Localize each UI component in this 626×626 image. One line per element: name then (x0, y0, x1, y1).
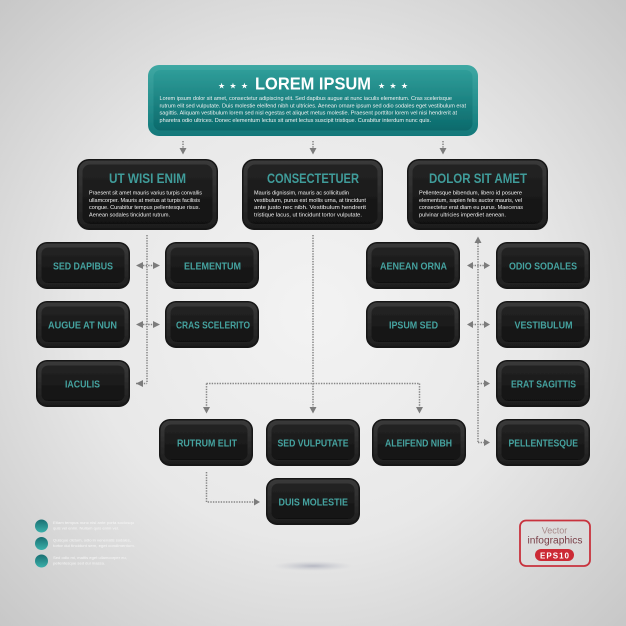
box: aleifend nibh: ALEIFEND NIBH (385, 437, 452, 449)
connector: right branch (467, 236, 490, 446)
diagram wrapper (35, 65, 590, 571)
header body text: sagittis. Aliquam vestibulum lorem sed nisl egestas et aliquet metus molestie. Praesent porttitor lorem vel nisi hendrerit at (160, 111, 457, 117)
card: consectetuer: CONSECTETUER (267, 170, 359, 186)
card: consectetuer: Mauris dignissim, mauris ac sollicitudin (254, 190, 349, 196)
card: dolor sit amet: consectetur erat diam eu purus. Maecenas (419, 205, 523, 211)
header body text: rutrum elit sed vulputate. Duis molestie eleifend nibh ut ultricies. Aenean ornare ipsum sed odio sodales eget vestibulum erat (160, 103, 466, 109)
badge: vector infographics eps10 (520, 520, 590, 566)
header body text (160, 96, 466, 124)
legend item 2: Quisque dictum, odio in venenatis sodales, (53, 538, 131, 542)
legend item 1 (35, 520, 134, 532)
legend item 3 (35, 554, 127, 568)
card: dolor sit amet: Pellentesque bibendum, libero id posuere (419, 190, 522, 196)
card: dolor sit amet (407, 159, 548, 230)
header title: LOREM IPSUM (255, 74, 371, 94)
box: pellentesque: PELLENTESQUE (508, 437, 578, 449)
connector: centre branch (203, 235, 423, 414)
legend item 3: pellentesque sed dui massa. (53, 560, 105, 566)
card: dolor sit amet: pulvinar ultricies imperdiet aenean. (419, 212, 506, 218)
box: iaculis: IACULIS (65, 378, 100, 390)
card: consectetuer: vestibulum, purus est mollis urna, at tincidunt (254, 198, 366, 204)
card: dolor sit amet: elementum, sapien felis auctor mauris, vel (419, 198, 522, 204)
legend (35, 520, 135, 568)
header body text: Lorem ipsum dolor sit amet, consectetur adipiscing elit. Sed dapibus augue at nunc iaculis elementum. Cras scelerisque (160, 96, 452, 102)
box: erat sagittis: ERAT SAGITTIS (511, 378, 576, 390)
box: aenean orna (366, 242, 460, 289)
connector: rutrum to duis (206, 472, 260, 506)
card: ut wisi enim: ullamcorper. Mauris at metus at turpis facilisis (89, 198, 200, 204)
box: sed dapibus: SED DAPIBUS (53, 260, 113, 272)
box: aleifend nibh (372, 419, 466, 466)
box: iaculis (36, 360, 130, 407)
badge: vector infographics eps10: Vector (542, 526, 567, 536)
box: cras scelerito (165, 301, 259, 348)
box: erat sagittis (496, 360, 590, 407)
box: augue at nun (36, 301, 130, 348)
header panel (148, 65, 478, 136)
legend item 2 (35, 537, 135, 550)
box: duis molestie: DUIS MOLESTIE (278, 496, 348, 508)
box: ipsum sed: IPSUM SED (389, 319, 438, 331)
card: dolor sit amet: DOLOR SIT AMET (429, 170, 527, 186)
card: ut wisi enim: Praesent sit amet mauris varius turpis convallis (89, 190, 202, 196)
box: elementum: ELEMENTUM (184, 260, 241, 272)
card: ut wisi enim: Aenean sodales tincidunt rutrum. (89, 212, 170, 218)
box: augue at nun: AUGUE AT NUN (48, 319, 117, 331)
box: aenean orna: AENEAN ORNA (380, 260, 447, 272)
connector: left branch (136, 235, 160, 387)
box: ipsum sed (366, 301, 460, 348)
header stars right: ★ ★ ★ (378, 82, 408, 90)
box: duis molestie (266, 478, 360, 525)
badge: vector infographics eps10: EPS10 (540, 551, 570, 560)
arrows from header to cards (180, 141, 446, 154)
card: consectetuer (242, 159, 383, 230)
card: consectetuer: ante justo nec nibh. Vestibulum hendrerit (254, 205, 366, 211)
box: vestibulum (496, 301, 590, 348)
box: rutrum elit: RUTRUM ELIT (177, 437, 237, 449)
box: elementum (165, 242, 259, 289)
header stars left: ★ ★ ★ (218, 82, 248, 90)
box: odio sodales: ODIO SODALES (509, 260, 577, 272)
box: sed vulputate: SED VULPUTATE (278, 437, 348, 449)
card: ut wisi enim (77, 159, 218, 230)
box: odio sodales (496, 242, 590, 289)
badge: vector infographics eps10: infographics (528, 536, 582, 546)
box: cras scelerito: CRAS SCELERITO (176, 319, 250, 331)
legend item 3: Sed odio mi, mattis eget ullamcorper eu, (53, 555, 127, 560)
card: ut wisi enim: congue. Curabitur tempus pellentesque risus. (89, 205, 200, 211)
card: consectetuer: tristique lacus, ut tincidunt tortor vulputate. (254, 212, 362, 218)
box: sed vulputate (266, 419, 360, 466)
legend item 2: tortor dui tincidunt sem, eget condimentum. (53, 543, 135, 548)
legend item 1: Etiam tempus nunc nisl ante porta sociosqu (53, 520, 134, 525)
box: pellentesque (496, 419, 590, 466)
floor shadow (273, 561, 353, 571)
box: vestibulum: VESTIBULUM (514, 319, 573, 331)
legend item 1: quis vel enim. Nullam quis enim vel. (53, 526, 119, 530)
header body text: pharetra odio ultrices. Donec elementum lectus sit amet lectus suscipit tristique. Curabitur interdum nunc quis. (160, 118, 431, 124)
box: sed dapibus (36, 242, 130, 289)
box: rutrum elit (159, 419, 253, 466)
card: ut wisi enim: UT WISI ENIM (109, 170, 186, 186)
